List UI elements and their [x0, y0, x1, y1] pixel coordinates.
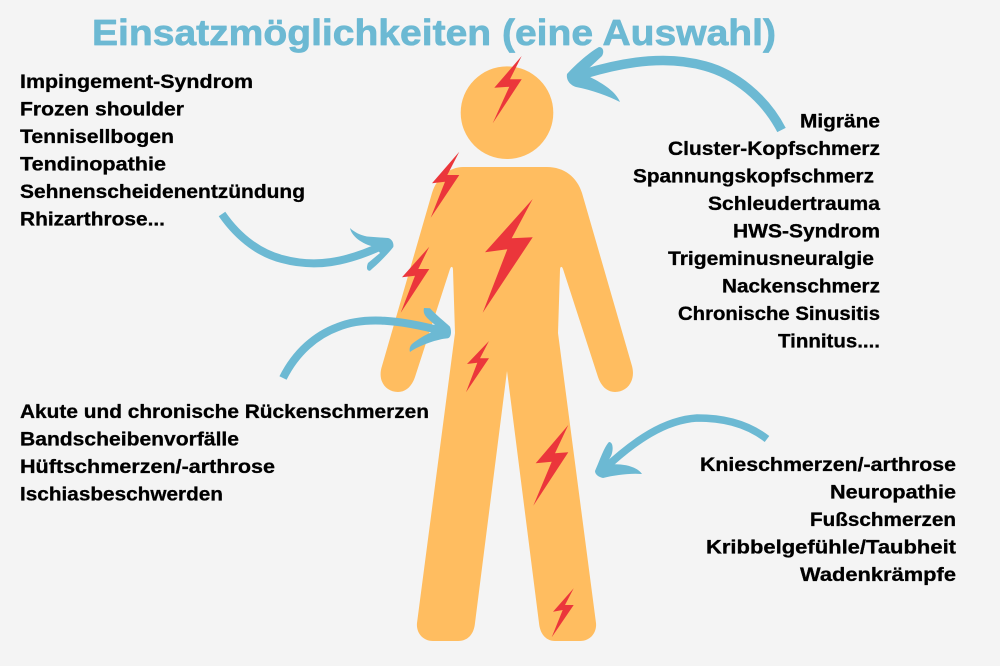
- text block: head and neck conditions: HWS-Syndrom: [733, 222, 880, 242]
- text block: back and hip conditions: Akute und chronische Rückenschmerzen: [20, 402, 429, 423]
- text block: shoulder and arm conditions: Sehnenscheidenentzündung: [20, 182, 305, 203]
- text block: back and hip conditions: Bandscheibenvorfälle: [20, 430, 239, 450]
- bolt: thigh: [533, 425, 568, 506]
- text block: head and neck conditions: Migräne: [800, 112, 880, 132]
- arrow: back conditions to torso: [283, 308, 451, 378]
- text block: leg and foot conditions: Kribbelgefühle/Taubheit: [706, 538, 957, 558]
- bolt: chest: [483, 199, 533, 313]
- text block: back and hip conditions: Hüftschmerzen/-arthrose: [20, 457, 275, 478]
- text block: shoulder and arm conditions: Impingement-Syndrom: [20, 72, 253, 93]
- arrow: arm conditions to arm: [222, 214, 393, 271]
- text block: back and hip conditions: [20, 402, 429, 506]
- text block: shoulder and arm conditions: Rhizarthrose...: [20, 210, 165, 230]
- text block: shoulder and arm conditions: Tendinopathie: [20, 154, 166, 176]
- human figure with pain bolts: [381, 56, 633, 641]
- text block: head and neck conditions: Chronische Sinusitis: [678, 304, 880, 325]
- text block: leg and foot conditions: [700, 455, 957, 586]
- arrow: leg conditions to leg: [595, 418, 767, 478]
- bolt: hip: [466, 341, 489, 392]
- figure: head: [461, 66, 553, 159]
- text block: back and hip conditions: Ischiasbeschwerden: [20, 484, 223, 506]
- text block: shoulder and arm conditions: Frozen shoulder: [20, 100, 185, 120]
- arrow: head conditions to head: [567, 47, 782, 130]
- title: Einsatzmöglichkeiten (eine Auswahl): [92, 12, 776, 53]
- figure: body: [381, 167, 633, 641]
- bolt: shoulder: [431, 152, 459, 218]
- text block: head and neck conditions: Spannungskopfschmerz: [633, 166, 874, 188]
- text block: leg and foot conditions: Neuropathie: [830, 482, 956, 504]
- text block: head and neck conditions: Schleudertrauma: [708, 194, 880, 215]
- text block: head and neck conditions: Tinnitus....: [778, 332, 880, 352]
- text block: leg and foot conditions: Fußschmerzen: [810, 510, 956, 531]
- bolt: arm: [401, 247, 429, 313]
- text block: shoulder and arm conditions: Tennisellbogen: [20, 127, 174, 148]
- bolt: head: [493, 56, 522, 123]
- text block: head and neck conditions: [633, 112, 880, 352]
- text block: head and neck conditions: Nackenschmerz: [722, 276, 880, 298]
- text block: leg and foot conditions: Knieschmerzen/-arthrose: [700, 455, 956, 476]
- text block: shoulder and arm conditions: [20, 72, 305, 230]
- bolt: ankle: [552, 588, 574, 637]
- text block: leg and foot conditions: Wadenkrämpfe: [800, 565, 956, 586]
- text block: head and neck conditions: Trigeminusneuralgie: [668, 249, 874, 270]
- text block: head and neck conditions: Cluster-Kopfschmerz: [668, 139, 880, 160]
